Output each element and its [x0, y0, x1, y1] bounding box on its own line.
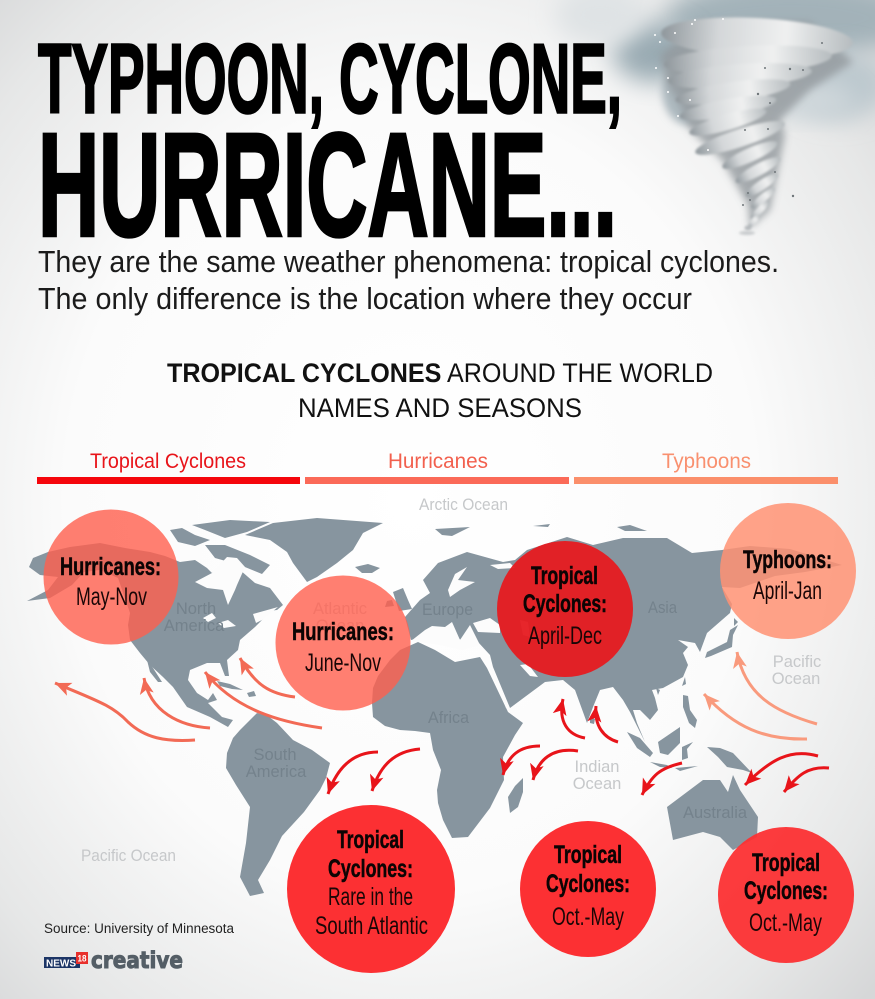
Philippines	[683, 695, 697, 728]
label: North America: America	[164, 617, 225, 635]
bubble: hurricanes Pacific: Hurricanes:	[60, 553, 161, 581]
bubble: tropical cyclones South Atlantic	[287, 805, 455, 973]
Madagascar	[508, 778, 523, 813]
Arctic islands	[170, 520, 270, 574]
subtitle: They are the same weather phenomena: tropical cyclones.	[38, 244, 779, 279]
bubble: tropical cyclones Australia: Tropical	[752, 849, 820, 877]
legend item: hurricanes: Hurricanes	[388, 450, 488, 473]
bubble: tropical cyclones Australia	[718, 827, 854, 963]
map labels	[81, 496, 821, 865]
arrows: hurricanes	[55, 658, 322, 740]
New Guinea	[707, 747, 752, 773]
world map	[27, 518, 842, 896]
label: Atlantic Ocean: Atlantic	[313, 600, 367, 618]
label: Australia: Australia	[683, 804, 748, 822]
bubble: tropical cyclones north Indian: April-Dec	[528, 622, 602, 650]
source note: Source: University of Minnesota	[44, 921, 234, 936]
arrows: typhoons	[704, 652, 817, 739]
Australia	[667, 775, 758, 850]
bubble: tropical cyclones South Atlantic: Tropical	[337, 826, 404, 854]
legend: cyclone names	[37, 450, 838, 484]
label: Europe: Europe	[422, 601, 473, 619]
bubble: hurricanes Pacific: May-Nov	[76, 583, 147, 611]
Eurasia	[405, 537, 842, 742]
logo: News18 Creative: NEWS	[46, 958, 76, 970]
bubble: tropical cyclones South Atlantic: Cyclones:	[328, 855, 413, 883]
bubble: hurricanes Pacific	[44, 510, 178, 644]
logo: News18 Creative: creative	[91, 948, 183, 974]
section heading: NAMES AND SEASONS	[298, 393, 582, 423]
label: Pacific Ocean east: Pacific	[773, 653, 821, 671]
legend item: hurricanes	[305, 450, 569, 484]
bubble: tropical cyclones South Atlantic: Rare in the	[328, 883, 413, 911]
bubble: hurricanes Atlantic	[276, 576, 410, 710]
bubble: tropical cyclones Australia: Oct.-May	[749, 909, 822, 937]
bubble: typhoons: April-Jan	[753, 577, 822, 605]
bubble: tropical cyclones south Indian: Tropical	[554, 841, 622, 869]
icon: tornado illustration	[555, 0, 875, 235]
section heading	[167, 358, 713, 423]
bubble: tropical cyclones south Indian: Cyclones:	[546, 870, 630, 898]
bubble: typhoons: Typhoons:	[743, 546, 832, 574]
Iceland	[355, 564, 380, 573]
label: Pacific Ocean west: Pacific Ocean	[81, 847, 176, 865]
British Isles	[385, 588, 412, 611]
Svalbard and Arctic islands	[435, 524, 647, 536]
bubble: tropical cyclones north Indian: Tropical	[531, 562, 598, 590]
Africa	[372, 642, 523, 838]
label: South America: America	[246, 763, 307, 781]
arrows	[55, 652, 829, 795]
bubble: hurricanes Atlantic: June-Nov	[305, 649, 381, 677]
label: Atlantic Ocean: Ocean	[316, 617, 364, 635]
bubble: hurricanes Atlantic: Hurricanes:	[292, 618, 394, 646]
inland seas	[195, 557, 538, 710]
North America	[27, 543, 283, 727]
Sumatra and Java	[627, 732, 698, 771]
Caribbean islands	[147, 660, 256, 697]
label: Africa: Africa	[428, 709, 470, 727]
section heading: TROPICAL CYCLONES AROUND THE WORLD	[167, 358, 713, 388]
bubble: typhoons	[720, 503, 856, 639]
legend item: tropical cyclones: Tropical Cyclones	[90, 450, 246, 473]
legend item: typhoons	[574, 450, 838, 484]
Hainan and Taiwan	[656, 677, 686, 695]
Japan	[705, 618, 738, 658]
bubble: tropical cyclones Australia: Cyclones:	[744, 877, 828, 905]
legend item: tropical cyclones	[37, 450, 300, 484]
label: Indian Ocean: Indian	[575, 758, 619, 776]
Greenland	[245, 518, 383, 582]
subtitle	[38, 244, 779, 316]
South America	[226, 713, 330, 896]
label: North America: North	[176, 600, 216, 618]
arrows: tropical cyclones	[328, 699, 829, 795]
title	[38, 24, 622, 268]
Borneo and Sulawesi	[658, 727, 693, 760]
bubble: tropical cyclones South Atlantic: South Atlantic	[315, 912, 428, 940]
legend item: typhoons: Typhoons	[662, 450, 751, 473]
label: South America: South	[253, 746, 297, 764]
Sri Lanka	[590, 717, 595, 724]
bubble: tropical cyclones south Indian	[520, 821, 656, 957]
label: Pacific Ocean east: Ocean	[772, 670, 820, 688]
bubble: tropical cyclones north Indian	[497, 541, 633, 677]
label: Arctic Ocean: Arctic Ocean	[419, 496, 508, 514]
logo: News18 Creative	[44, 948, 183, 974]
label: Indian Ocean: Ocean	[573, 775, 621, 793]
bubble: tropical cyclones north Indian: Cyclones:	[523, 590, 607, 618]
label: Asia: Asia	[648, 599, 678, 617]
subtitle: The only difference is the location where they occur	[38, 281, 692, 316]
logo: News18 Creative: 18	[78, 954, 86, 964]
bubble: tropical cyclones south Indian: Oct.-May	[552, 903, 624, 931]
